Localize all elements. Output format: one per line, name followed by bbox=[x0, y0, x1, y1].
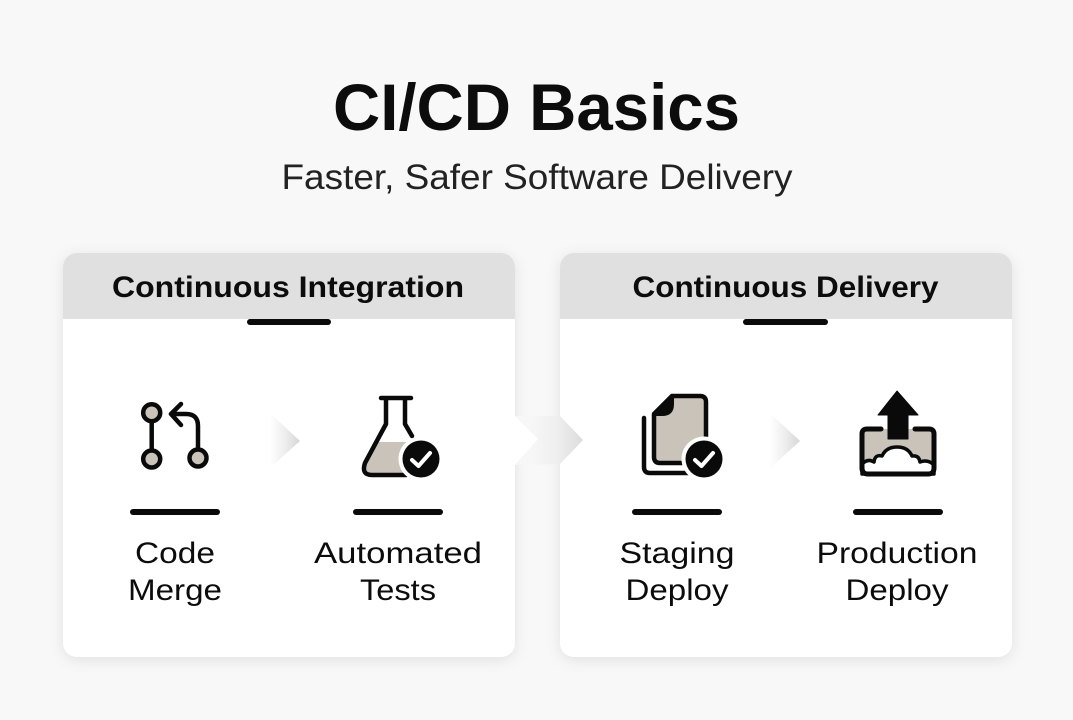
divider: staging deploy bbox=[632, 509, 722, 515]
panel: continuous delivery bbox=[560, 253, 1012, 657]
header tab bar bbox=[743, 319, 828, 325]
label: code merge: Code bbox=[135, 537, 215, 570]
label: automated tests bbox=[314, 537, 482, 607]
label: production deploy: Production bbox=[816, 537, 978, 570]
label: automated tests: Tests bbox=[360, 574, 436, 607]
heading: continuous integration: Continuous Integration bbox=[112, 271, 464, 304]
icon: code merge bbox=[143, 404, 206, 468]
icon: automated tests flask bbox=[364, 398, 444, 482]
label: production deploy bbox=[816, 537, 978, 607]
label: production deploy: Deploy bbox=[846, 574, 948, 607]
title: CI/CD Basics bbox=[333, 70, 740, 144]
panel header: continuous delivery bbox=[560, 253, 1012, 319]
arrow: merge to tests bbox=[270, 413, 300, 468]
icon: staging deploy document bbox=[644, 396, 726, 482]
divider: automated tests bbox=[353, 509, 443, 515]
label: automated tests: Automated bbox=[314, 537, 482, 570]
label: staging deploy bbox=[620, 537, 734, 607]
arrow: integration to delivery bbox=[515, 416, 583, 465]
label: staging deploy: Deploy bbox=[626, 574, 728, 607]
panel header: continuous integration bbox=[63, 253, 515, 319]
label: code merge bbox=[128, 537, 222, 607]
heading: continuous delivery: Continuous Delivery bbox=[632, 271, 939, 304]
label: code merge: Merge bbox=[128, 574, 222, 607]
subtitle: Faster, Safer Software Delivery bbox=[282, 158, 793, 197]
icon: production deploy upload bbox=[862, 391, 934, 474]
header tab bar bbox=[247, 319, 331, 325]
label: staging deploy: Staging bbox=[620, 537, 734, 570]
arrow: staging to production bbox=[770, 413, 800, 468]
panel: continuous integration bbox=[63, 253, 515, 657]
divider: production deploy bbox=[853, 509, 943, 515]
divider: code merge bbox=[130, 509, 220, 515]
